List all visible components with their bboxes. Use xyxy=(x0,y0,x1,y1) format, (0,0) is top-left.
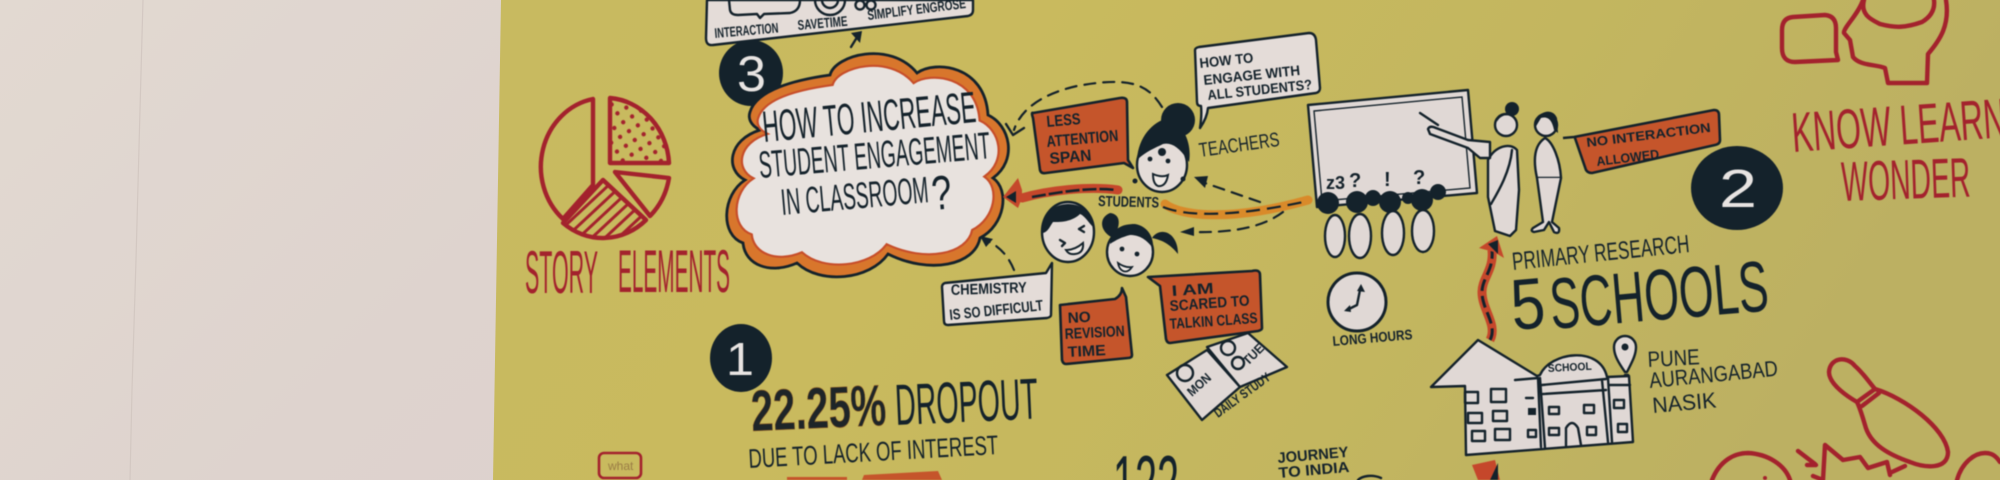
bubble: no revision time xyxy=(1060,288,1132,364)
bubble: how to engage: ALL STUDENTS? xyxy=(1207,76,1313,103)
statistic: dropout xyxy=(750,367,1039,444)
arrow: teacher to cloud dashed xyxy=(1006,82,1162,135)
tag: what: what xyxy=(607,459,634,473)
panel: top benefits box: SAVETIME xyxy=(797,13,848,33)
arrow: school to research squiggle xyxy=(1479,236,1504,340)
list: cities xyxy=(1647,344,1779,418)
list: cities: AURANGABAD xyxy=(1648,356,1779,393)
icon: pie chart xyxy=(541,98,669,238)
bubble: scared to talk: SCARED TO xyxy=(1169,292,1250,315)
poster drawings: DROPOUT xyxy=(894,367,1039,438)
icon: school building xyxy=(1431,340,1633,455)
icon: second pin clipped xyxy=(1957,453,2000,480)
poster drawings: ELEMENTS xyxy=(618,238,730,305)
arrow: classroom to teacher xyxy=(1194,176,1260,202)
bubble: no interaction allowed: NO INTERACTION xyxy=(1586,120,1711,150)
list: cities: NASIK xyxy=(1651,387,1717,418)
icon: bubble clipped xyxy=(1358,476,1381,480)
icon: girl head xyxy=(1102,213,1178,276)
yellow poster panel xyxy=(493,0,2000,480)
arrow: chemistry to cloud xyxy=(980,236,1014,270)
arrow: students to cloud red xyxy=(1003,178,1118,208)
statistic: dropout: 22.25% xyxy=(750,373,887,444)
bubble: no interaction allowed: ALLOWED xyxy=(1596,146,1660,169)
cloud: central question: IN CLASSROOM xyxy=(779,169,930,223)
bubble: no interaction allowed xyxy=(1563,110,1720,173)
icon: teacher head xyxy=(1132,103,1195,192)
badge: number 2: 2 xyxy=(1719,159,1757,219)
icon: classroom whiteboard with audience: ! xyxy=(1384,169,1391,191)
cloud: central question: HOW TO INCREASE xyxy=(760,83,978,152)
bubble: chemistry: CHEMISTRY xyxy=(951,279,1027,299)
wall crack xyxy=(130,0,143,480)
clipped orange labels at bottom xyxy=(787,471,942,480)
icon: daily study book: TUE xyxy=(1240,340,1267,368)
icon: classroom whiteboard with audience: ? xyxy=(1349,170,1361,192)
badge: number 1 xyxy=(710,324,772,392)
arrow: classroom to students orange xyxy=(1163,200,1308,215)
heading: story elements: STORY xyxy=(525,239,598,306)
bubble: less attention span xyxy=(1032,98,1133,173)
subtext: lack of interest: DUE TO LACK OF INTEREST xyxy=(748,430,999,474)
icon: map pin xyxy=(1614,336,1636,375)
bubble: less attention span: SPAN xyxy=(1049,147,1092,168)
icon: boy head xyxy=(1042,202,1094,262)
badge: number 1: 1 xyxy=(726,333,754,385)
bubble: scared to talk: TALKIN CLASS xyxy=(1169,310,1258,333)
icon: student figure xyxy=(1532,112,1561,233)
heading: 5 schools: 5 xyxy=(1508,263,1548,346)
icon: bowling pin xyxy=(1829,359,1948,466)
bubble: how to engage: HOW TO xyxy=(1199,49,1254,71)
cloud: central question: ? xyxy=(929,166,954,221)
bubble: no revision time: TIME xyxy=(1067,342,1106,361)
icon: daily study book: DAILY STUDY xyxy=(1211,369,1273,420)
bubble: chemistry xyxy=(942,263,1052,325)
icon: teacher figure xyxy=(1420,102,1519,236)
list: cities: PUNE xyxy=(1647,344,1700,372)
arrow: cloud to top box xyxy=(851,31,862,47)
icon: clock xyxy=(1328,273,1386,331)
icon: classroom whiteboard with audience xyxy=(1308,90,1477,258)
icon: bowling ball xyxy=(1712,453,1790,480)
badge: number 3 xyxy=(719,40,783,106)
bubble: no revision time: REVISION xyxy=(1064,323,1125,343)
tag: what xyxy=(599,453,641,478)
bubble: how to engage xyxy=(1195,33,1320,128)
bubble: less attention span: LESS xyxy=(1046,111,1081,131)
bubble: how to engage: ENGAGE WITH xyxy=(1203,62,1301,88)
icon: impact burst xyxy=(1798,445,1905,480)
arrow: below school xyxy=(1472,460,1500,480)
icon: daily study book xyxy=(1167,333,1287,420)
label: teachers: TEACHERS xyxy=(1198,129,1281,162)
cloud: central question: STUDENT ENGAGEMENT xyxy=(757,125,992,187)
icon: classroom whiteboard with audience: ? xyxy=(1413,167,1425,189)
bubble: scared to talk: I AM xyxy=(1171,280,1214,300)
badge: number 2 xyxy=(1691,146,1783,230)
label: journey to india xyxy=(1277,444,1350,480)
bubble: scared to talk xyxy=(1148,270,1262,343)
badge: number 3: 3 xyxy=(737,46,766,102)
label: long hours: LONG HOURS xyxy=(1332,326,1413,349)
bubble: chemistry: IS SO DIFFICULT xyxy=(949,297,1044,324)
cloud: central question xyxy=(727,54,1008,277)
heading: 5 schools xyxy=(1508,247,1772,346)
arrow: classroom to girl xyxy=(1180,212,1283,236)
bubble: no revision time: NO xyxy=(1067,309,1092,327)
icon: daily study book: MON xyxy=(1184,370,1214,399)
panel: top benefits box: INTERACTION xyxy=(714,19,779,41)
poster drawings xyxy=(525,0,2000,480)
panel: top benefits box xyxy=(706,0,973,45)
heading: know learn wonder xyxy=(1789,86,2000,213)
heading: primary research: PRIMARY RESEARCH xyxy=(1511,230,1691,276)
icon: classroom whiteboard with audience: z3 xyxy=(1326,173,1345,193)
label: journey to india: JOURNEY xyxy=(1277,444,1349,467)
icon: school building: SCHOOL xyxy=(1548,361,1592,375)
heading: 5 schools: SCHOOLS xyxy=(1547,247,1772,345)
icon: head with speech bubble xyxy=(1782,0,1947,83)
bubble: less attention span: ATTENTION xyxy=(1046,128,1119,151)
label: students: STUDENTS xyxy=(1098,193,1159,212)
